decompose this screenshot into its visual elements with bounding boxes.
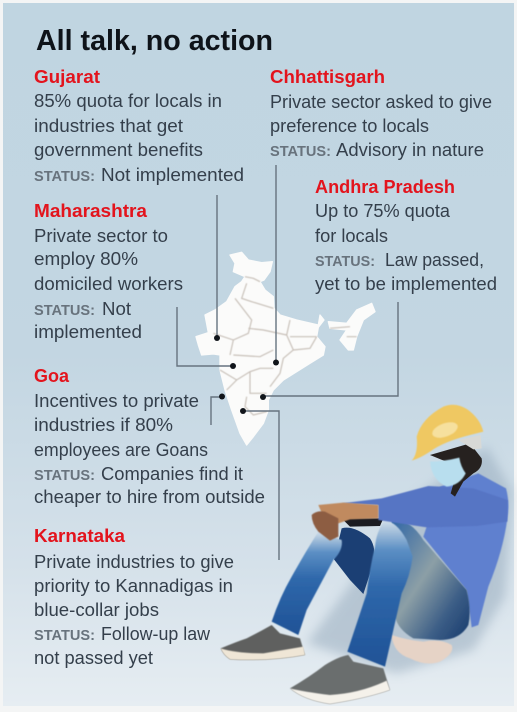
Karnataka heading: Karnataka — [34, 525, 126, 546]
forearm — [318, 503, 378, 523]
leader line: Gujarat — [216, 195, 218, 338]
Goa text: cheaper to hire from outside — [34, 486, 265, 507]
Maharashtra text: Not — [102, 298, 131, 319]
Andhra Pradesh text — [315, 200, 497, 294]
Goa text: industries if 80% — [34, 414, 173, 435]
Goa heading: Goa — [34, 365, 70, 386]
leader line: Goa — [211, 397, 222, 425]
Goa text: employees are Goans — [34, 439, 208, 460]
Gujarat text: industries that get — [34, 115, 183, 136]
Karnataka text: Follow-up law — [101, 623, 211, 644]
sleeve — [342, 486, 508, 527]
near shoe — [290, 655, 390, 704]
Gujarat text: Not implemented — [101, 164, 244, 185]
Andhra Pradesh text: Up to 75% quota — [315, 200, 451, 221]
hands — [312, 511, 338, 541]
face mask — [430, 458, 466, 487]
helmet strap — [458, 435, 482, 449]
Karnataka text: blue-collar jobs — [34, 599, 159, 620]
helmet — [412, 405, 483, 461]
worker illustration — [221, 405, 512, 704]
Karnataka text — [34, 551, 234, 668]
Gujarat heading: Gujarat — [34, 66, 100, 87]
far shin — [272, 532, 342, 635]
Maharashtra text: Private sector to — [34, 225, 168, 246]
Andhra Pradesh text: for locals — [315, 225, 388, 246]
panel: Maharashtra — [34, 200, 183, 342]
rock — [392, 635, 452, 664]
Maharashtra text — [34, 225, 183, 342]
Gujarat text — [34, 90, 244, 185]
Maharashtra text: STATUS: — [34, 303, 95, 319]
map of India — [196, 252, 375, 445]
Chhattisgarh text: STATUS: — [270, 144, 331, 160]
panel: Gujarat — [34, 66, 244, 185]
title: All talk, no action — [36, 25, 273, 57]
Gujarat text: STATUS: — [34, 169, 95, 185]
Maharashtra text: employ 80% — [34, 248, 138, 269]
Karnataka text: Private industries to give — [34, 551, 234, 572]
Andhra Pradesh text: Law passed, — [385, 249, 484, 270]
Goa text: Incentives to private — [34, 390, 199, 411]
Chhattisgarh text: Private sector asked to give — [270, 91, 492, 112]
Maharashtra text: domiciled workers — [34, 273, 183, 294]
leader line: Andhra Pradesh — [263, 302, 398, 396]
Chhattisgarh text: preference to locals — [270, 115, 429, 136]
front leg — [347, 521, 413, 667]
shadow — [307, 447, 512, 673]
neck and hair — [430, 443, 482, 497]
Gujarat text: government benefits — [34, 139, 203, 160]
Maharashtra heading: Maharashtra — [34, 200, 148, 221]
far shoe — [221, 625, 305, 660]
Goa text — [34, 390, 265, 507]
map location dots — [214, 335, 279, 414]
Goa text: Companies find it — [101, 463, 243, 484]
panel: Chhattisgarh — [270, 66, 492, 160]
panel: Karnataka — [34, 525, 234, 668]
Andhra Pradesh heading: Andhra Pradesh — [315, 176, 455, 197]
helmet highlight — [430, 419, 460, 441]
arm shadow — [342, 518, 383, 527]
Karnataka text: STATUS: — [34, 628, 95, 644]
Chhattisgarh heading: Chhattisgarh — [270, 66, 385, 87]
leader line: Maharashtra — [177, 307, 233, 366]
Karnataka text: not passed yet — [34, 647, 153, 668]
Gujarat text: 85% quota for locals in — [34, 90, 222, 111]
leader line: Karnataka — [243, 411, 279, 560]
Chhattisgarh text: Advisory in nature — [336, 139, 484, 160]
leader line: Chhattisgarh — [275, 165, 277, 362]
panel: Goa — [34, 365, 265, 507]
Andhra Pradesh text: STATUS: — [315, 254, 375, 270]
jeans hip — [390, 520, 470, 640]
Karnataka text: priority to Kannadigas in — [34, 575, 233, 596]
rear leg — [334, 528, 374, 594]
Andhra Pradesh text: yet to be implemented — [315, 273, 497, 294]
Chhattisgarh text — [270, 91, 492, 160]
shirt body — [423, 473, 508, 627]
Maharashtra text: implemented — [34, 321, 142, 342]
panel: Andhra Pradesh — [315, 176, 497, 294]
Goa text: STATUS: — [34, 468, 95, 484]
